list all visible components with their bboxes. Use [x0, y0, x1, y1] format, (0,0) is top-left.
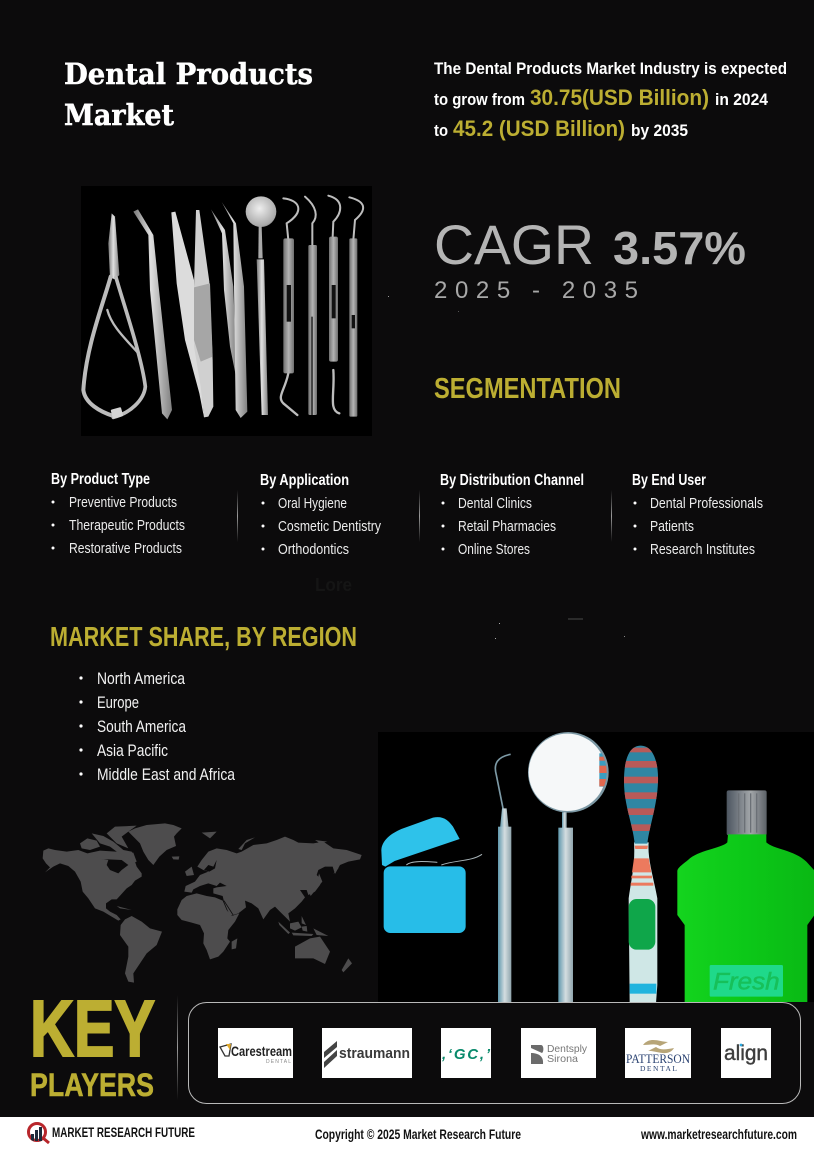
logo: Dentsply Sirona: Sirona: [547, 1053, 578, 1065]
segment: by end user: Research Institutes: [650, 542, 755, 558]
segment: by end user: [632, 472, 763, 558]
logo: Carestream: [218, 1028, 293, 1078]
floss box: [381, 817, 482, 933]
logo: Straumann: [322, 1028, 412, 1078]
footer: [0, 1117, 814, 1150]
segment: by end user: By End User: [632, 472, 706, 489]
key players panel: [188, 1002, 800, 1104]
segment: by distribution channel: [440, 472, 584, 558]
market forecast summary: 30.75(USD Billion): [530, 85, 709, 110]
logo: Carestream: Carestream: [231, 1044, 292, 1059]
logo: GC: ,‘GC,’: [441, 1046, 491, 1063]
logo: Patterson Dental: PATTERSON: [626, 1051, 691, 1066]
image: dental instruments: [81, 186, 372, 436]
logo: GC: [441, 1028, 491, 1078]
segment: by application: Orthodontics: [278, 542, 349, 558]
title: Market: [64, 98, 175, 132]
segment: by application: By Application: [260, 472, 349, 489]
logo: Carestream: DENTAL: [266, 1059, 291, 1065]
toothbrush: [624, 746, 658, 1002]
footer logo icon: [28, 1124, 49, 1143]
mouthwash bottle: [677, 790, 814, 1005]
market forecast summary: to: [434, 122, 448, 140]
mouth mirror: [528, 732, 609, 1004]
market forecast summary: in 2024: [715, 91, 769, 109]
segment: by distribution channel: Dental Clinics: [458, 496, 532, 512]
segment: by distribution channel: Online Stores: [458, 542, 530, 558]
region list: [79, 670, 236, 784]
probes: [281, 196, 363, 415]
logo: Dentsply Sirona: Dentsply: [547, 1043, 588, 1055]
faint ghost text: Lore: [315, 575, 352, 595]
logo: Straumann: straumann: [339, 1045, 410, 1062]
region list: South America: [97, 718, 187, 736]
segment: by application: Cosmetic Dentistry: [278, 519, 382, 535]
tweezers: [133, 209, 172, 419]
CAGR value: CAGR: [434, 213, 594, 276]
CAGR value: [434, 213, 746, 304]
world map: [43, 823, 362, 983]
logo: Patterson Dental: DENTAL: [640, 1064, 677, 1073]
segment: by product type: Therapeutic Products: [69, 518, 185, 534]
title: [64, 57, 313, 132]
market forecast summary: [434, 60, 787, 141]
footer: Copyright © 2025 Market Research Future: [315, 1127, 521, 1142]
segment: by end user: Patients: [650, 519, 694, 535]
logo: Align: [721, 1028, 771, 1078]
segment: by distribution channel: By Distribution Channel: [440, 472, 584, 489]
segment: by product type: [51, 471, 185, 557]
logo: Align: align: [724, 1042, 768, 1065]
CAGR value: 3.57%: [613, 222, 746, 274]
segment: by product type: Preventive Products: [69, 495, 177, 511]
segment: by distribution channel: Retail Pharmacies: [458, 519, 556, 535]
segment: by end user: Dental Professionals: [650, 496, 763, 512]
market forecast summary: 45.2 (USD Billion): [453, 116, 625, 141]
footer: MARKET RESEARCH FUTURE: [52, 1125, 195, 1140]
key players heading: PLAYERS: [30, 1067, 154, 1103]
segment: by product type: Restorative Products: [69, 541, 182, 557]
mirror: [246, 196, 276, 227]
market forecast summary: The Dental Products Market Industry is expected: [434, 60, 787, 78]
market share heading: MARKET SHARE, BY REGION: [50, 621, 357, 652]
mouthwash bottle: Fresh: [713, 969, 780, 996]
market forecast summary: by 2035: [631, 122, 688, 140]
CAGR value: 2025 - 2035: [434, 277, 638, 304]
region list: Asia Pacific: [97, 742, 168, 760]
segment: by application: Oral Hygiene: [278, 496, 347, 512]
logo: Dentsply Sirona: [521, 1028, 596, 1078]
key players heading: KEY: [30, 984, 155, 1073]
segment: by application: [260, 472, 382, 558]
probe: [495, 754, 511, 1003]
region list: Europe: [97, 694, 139, 712]
image: dental care products: [378, 732, 814, 1005]
market forecast summary: to grow from: [434, 91, 525, 109]
logo: Patterson Dental: [625, 1028, 691, 1078]
region list: Middle East and Africa: [97, 766, 236, 784]
segment: by product type: By Product Type: [51, 471, 150, 488]
title: Dental Products: [64, 57, 313, 91]
needle holder: [83, 213, 145, 419]
segmentation heading: SEGMENTATION: [434, 373, 621, 405]
key players heading: [30, 984, 155, 1103]
region list: North America: [97, 670, 186, 688]
